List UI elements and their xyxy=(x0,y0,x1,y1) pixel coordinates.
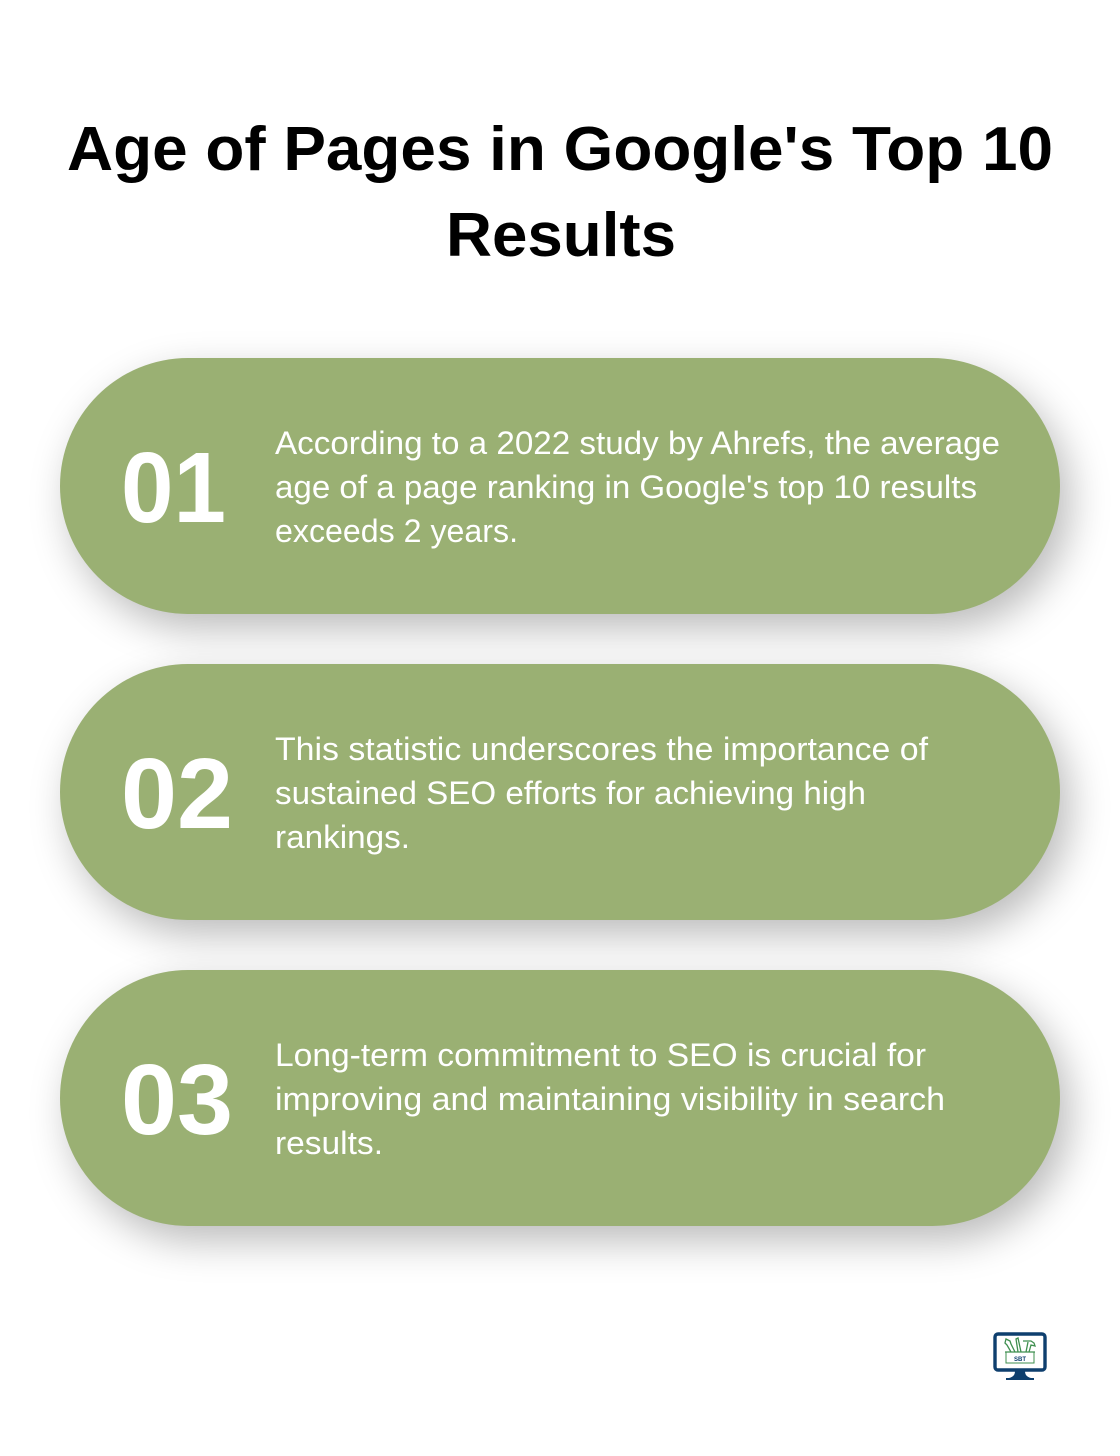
text block: card 03: Long-term commitment to SEO is crucial for xyxy=(275,1037,926,1073)
text block: card 02: sustained SEO efforts for achieving high xyxy=(275,775,866,811)
number 03: 03 xyxy=(121,1044,233,1156)
title: Age of Pages in Google's Top 10 xyxy=(67,115,1053,184)
number 01: 01 xyxy=(121,432,226,544)
title xyxy=(67,115,1053,270)
icon: monitor with toolbox logo xyxy=(995,1334,1045,1380)
text block: card 03: results. xyxy=(275,1125,383,1161)
text block: card 01: According to a 2022 study by Ahrefs, the average xyxy=(275,425,1000,461)
text block: card 02: rankings. xyxy=(275,819,410,855)
number 02: 02 xyxy=(121,738,233,850)
text block: card 02: This statistic underscores the importance of xyxy=(275,731,928,767)
text block: card 01 xyxy=(275,425,1000,549)
icon: monitor with toolbox logo: SBT xyxy=(1014,1357,1026,1363)
text block: card 03 xyxy=(275,1037,945,1161)
panel: card 01 xyxy=(60,358,1060,614)
text block: card 03: improving and maintaining visibility in search xyxy=(275,1081,945,1117)
text block: card 02 xyxy=(275,731,928,855)
text block: card 01: exceeds 2 years. xyxy=(275,513,518,549)
text block: card 01: age of a page ranking in Google's top 10 results xyxy=(275,469,977,505)
title: Results xyxy=(446,201,676,270)
panel: card 03 xyxy=(60,970,1060,1226)
panel: card 02 xyxy=(60,664,1060,920)
